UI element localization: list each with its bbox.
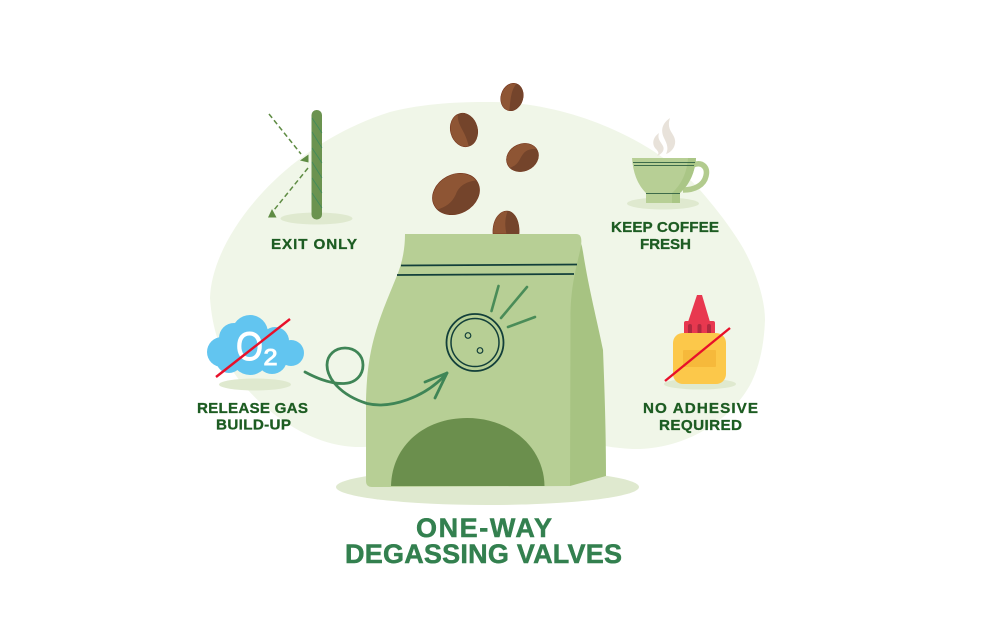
valve bar xyxy=(312,110,322,220)
bean 5 xyxy=(492,210,520,234)
arrow: curly to valve xyxy=(305,348,447,405)
label: release gas build-up xyxy=(197,400,308,434)
label: release gas build-up: RELEASE GAS xyxy=(197,400,308,417)
label: keep coffee fresh: FRESH xyxy=(640,236,691,253)
label: exit only: EXIT ONLY xyxy=(271,236,357,253)
label: keep coffee fresh xyxy=(611,219,719,253)
label: release gas build-up: BUILD-UP xyxy=(216,416,291,434)
shadow xyxy=(219,378,291,390)
coffee beans xyxy=(432,83,539,234)
title: ONE-WAY xyxy=(416,513,552,543)
panel: exit only xyxy=(268,110,357,253)
icon: oxygen cloud: O xyxy=(236,325,263,369)
shadow xyxy=(627,198,699,210)
bag front xyxy=(366,234,581,487)
coffee bag xyxy=(366,234,606,487)
strike line xyxy=(665,328,730,381)
bean 3 xyxy=(506,143,539,172)
panel: no adhesive xyxy=(643,295,758,434)
arrow: outgoing xyxy=(268,168,308,218)
label: no adhesive required xyxy=(643,400,758,434)
panel: keep coffee fresh xyxy=(611,118,719,253)
arch panel xyxy=(391,418,544,486)
label: no adhesive required: NO ADHESIVE xyxy=(643,400,758,417)
strike line xyxy=(216,319,290,377)
background blob xyxy=(210,102,765,449)
icon: oxygen cloud xyxy=(207,315,304,375)
title: DEGASSING VALVES xyxy=(345,539,622,569)
icon: glue bottle xyxy=(673,295,726,384)
label: no adhesive required: REQUIRED xyxy=(659,417,742,434)
bean 1 xyxy=(500,83,524,111)
gas rays xyxy=(492,286,535,327)
infographic xyxy=(198,83,765,564)
bag shadow xyxy=(336,469,639,505)
bag side panel xyxy=(565,240,606,486)
shadow xyxy=(664,378,736,390)
icon: oxygen cloud: 2 xyxy=(264,344,278,370)
shadow xyxy=(280,212,352,224)
bean 4 xyxy=(432,173,480,215)
title xyxy=(345,513,622,569)
icon: coffee cup xyxy=(632,158,706,203)
bag fold lines xyxy=(397,264,577,275)
arrow: incoming blocked xyxy=(269,114,308,162)
valve icon xyxy=(446,314,504,371)
panel: release gas xyxy=(197,315,308,434)
icon: steam xyxy=(653,118,675,156)
bean 2 xyxy=(450,112,478,148)
label: keep coffee fresh: KEEP COFFEE xyxy=(611,219,719,236)
